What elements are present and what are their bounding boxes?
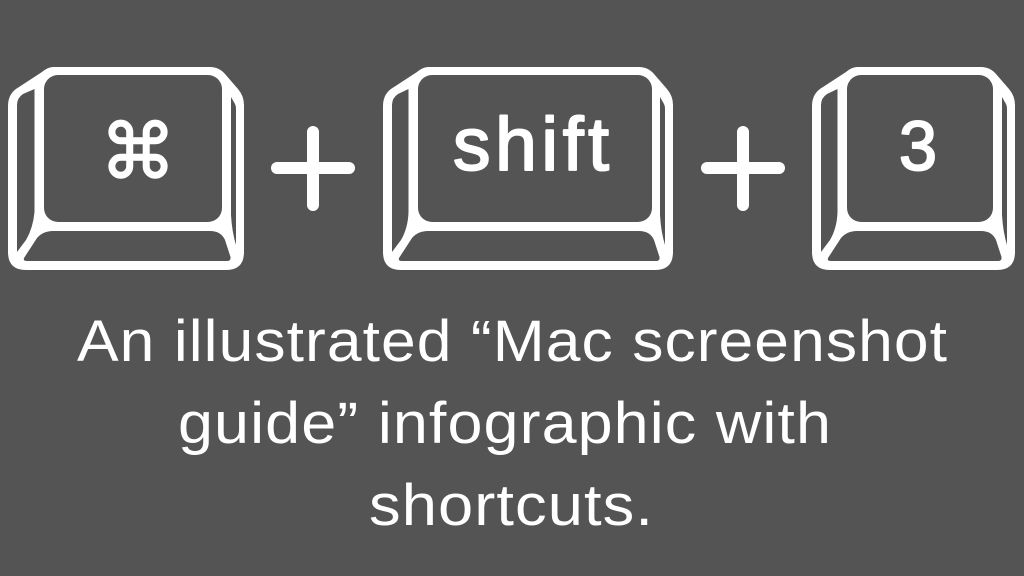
icon: command key (8, 67, 244, 270)
caption text: An illustrated “Mac screenshot (77, 309, 948, 374)
caption text: guide” infographic with (178, 391, 832, 456)
icon: shift key (383, 67, 673, 270)
command symbol: ⌘ (100, 107, 176, 196)
icon: number 3 key (812, 67, 1015, 270)
caption text: shortcuts. (369, 473, 654, 538)
caption text (77, 309, 948, 538)
icon: plus sign 2 (701, 126, 785, 211)
number 3 label: 3 (899, 107, 937, 185)
shift label: shift (453, 102, 609, 186)
icon: plus sign 1 (271, 126, 355, 211)
